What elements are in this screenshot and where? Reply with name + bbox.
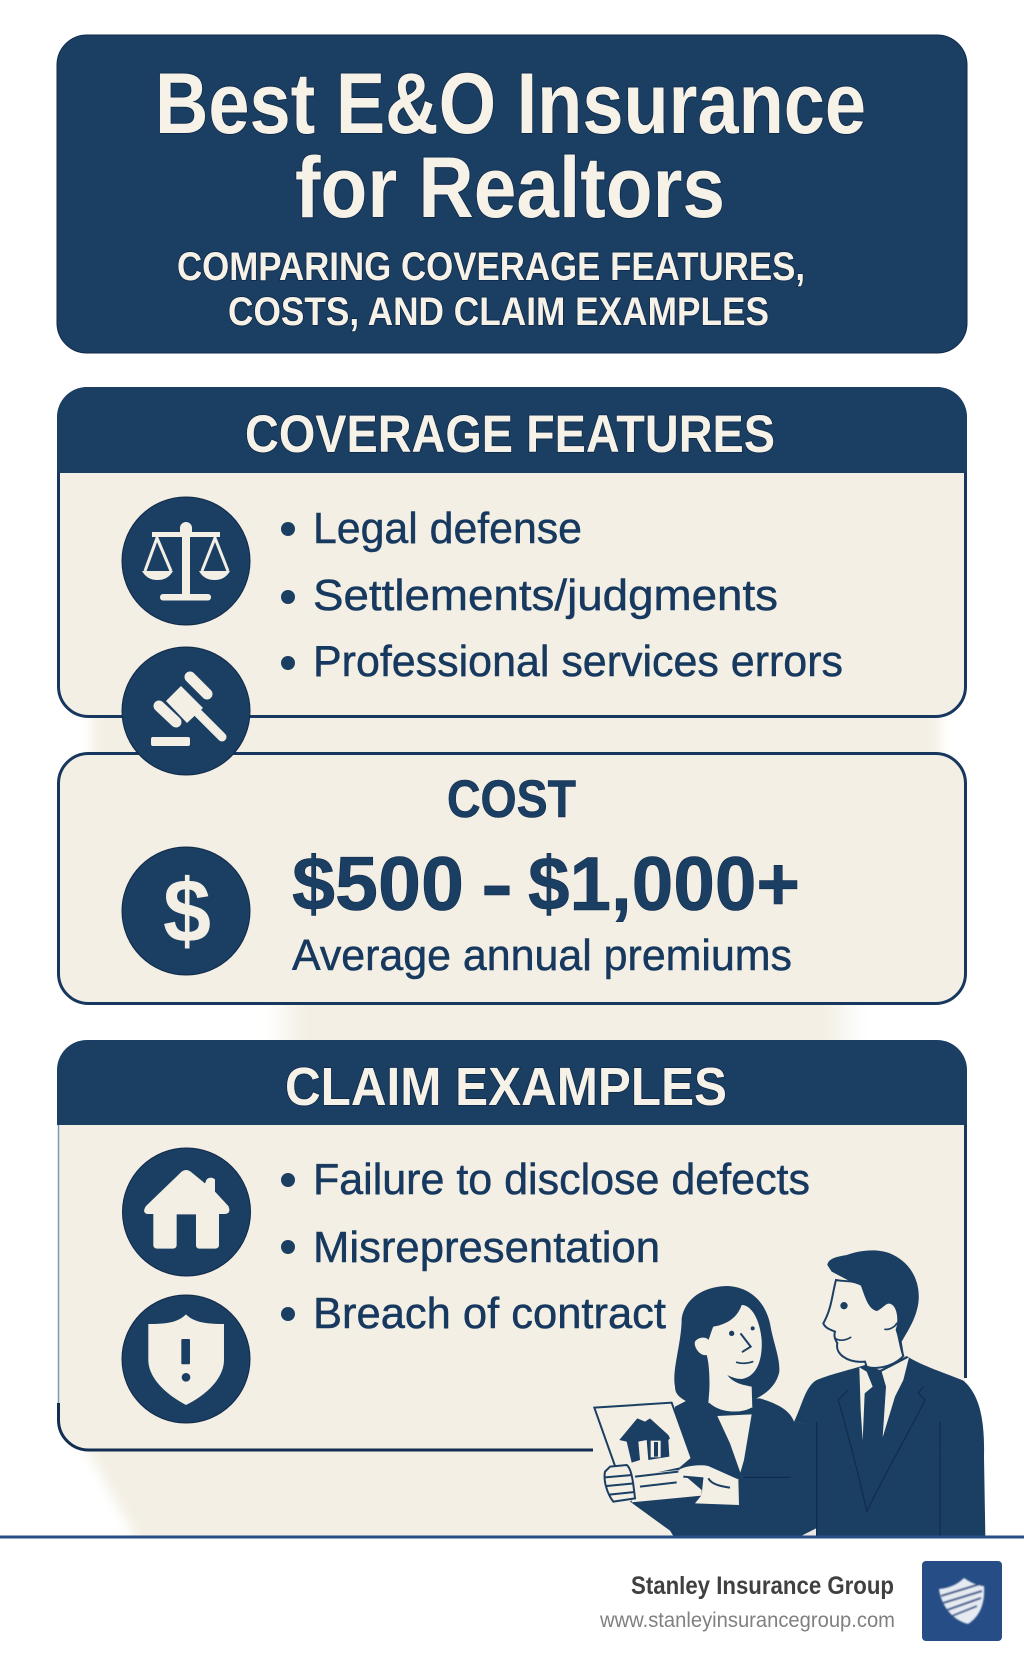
website: www.stanleyinsurancegroup.com xyxy=(599,1608,895,1632)
panel: claim examples xyxy=(57,1040,967,1450)
panel: coverage features xyxy=(57,387,967,716)
list: claim examples: Misrepresentation xyxy=(313,1223,660,1272)
cost range: $1,000+ xyxy=(528,842,800,927)
woman xyxy=(630,1286,818,1536)
icon: house xyxy=(122,1148,250,1276)
illustration: realtors with house document xyxy=(594,1250,985,1536)
list: coverage features: Professional services errors xyxy=(313,637,843,686)
subtitle: COMPARING COVERAGE FEATURES, xyxy=(177,245,805,289)
list: coverage features: Legal defense xyxy=(313,504,582,553)
footer rule xyxy=(0,1536,1024,1538)
document with house xyxy=(594,1403,702,1502)
panel: cost xyxy=(58,754,966,1004)
list: claim examples: Breach of contract xyxy=(313,1289,666,1338)
panel: header xyxy=(57,35,967,353)
heading: cost: COST xyxy=(447,770,576,829)
list: coverage features xyxy=(281,504,843,686)
list: coverage features: Settlements/judgments xyxy=(313,571,778,620)
heading: claim examples: CLAIM EXAMPLES xyxy=(285,1057,727,1117)
logo xyxy=(922,1561,1002,1641)
heading: coverage features: COVERAGE FEATURES xyxy=(245,405,775,464)
footer xyxy=(599,1561,1002,1641)
title xyxy=(155,56,866,236)
cost caption: Average annual premiums xyxy=(292,931,792,980)
icon: dollar sign xyxy=(122,847,250,975)
subtitle: COSTS, AND CLAIM EXAMPLES xyxy=(228,290,769,334)
brand name: Stanley Insurance Group xyxy=(631,1572,894,1600)
icon: warning shield xyxy=(122,1295,250,1423)
title: Best E&O Insurance xyxy=(155,56,866,152)
list: claim examples xyxy=(281,1155,810,1338)
subtitle xyxy=(177,245,805,334)
man xyxy=(794,1250,985,1536)
icon: gavel xyxy=(122,647,250,775)
icon: dollar sign: $ xyxy=(163,862,211,962)
hands xyxy=(605,1464,739,1505)
cost range: $500 xyxy=(292,842,464,927)
title: for Realtors xyxy=(295,140,725,236)
cost range xyxy=(292,842,800,927)
list: claim examples: Failure to disclose defects xyxy=(313,1155,810,1204)
icon: scales of justice xyxy=(122,497,250,625)
cost range: - xyxy=(481,842,513,927)
